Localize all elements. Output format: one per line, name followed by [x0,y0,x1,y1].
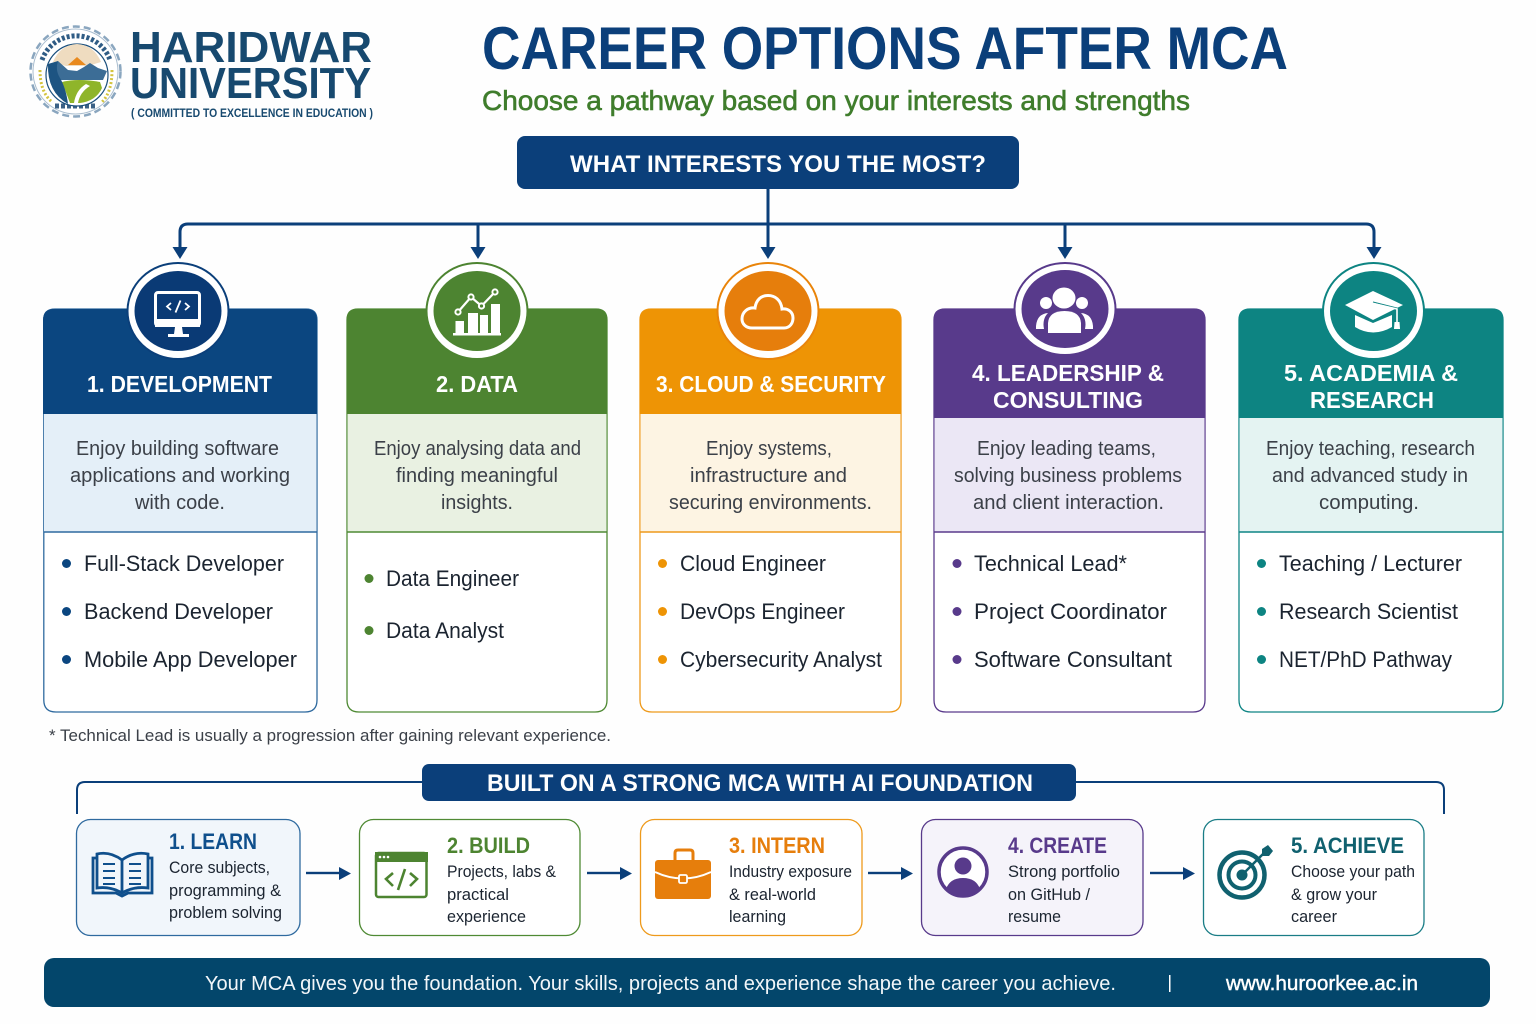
heading: 5. ACADEMIA & [1284,360,1458,386]
icon: profile [939,848,987,896]
arrow [306,867,351,880]
panel: 3. cloud and security [640,263,901,712]
role list: Cloud Engineer [680,551,826,576]
role list: DevOps Engineer [680,599,845,624]
logo wordmark: UNIVERSITY [130,59,371,108]
icon: monitor with code [128,263,228,359]
label: 1. LEARN [169,829,257,854]
text [169,859,282,922]
description: Enjoy leading teams, [977,438,1156,460]
icon: code window [375,852,428,897]
text: programming & [169,882,281,900]
role list [1257,551,1462,672]
subtitle: Choose a pathway based on your interests and strengths [482,85,1190,116]
role list: Teaching / Lecturer [1279,551,1462,576]
step 4: create [922,820,1143,936]
foundation banner: BUILT ON A STRONG MCA WITH AI FOUNDATION [487,770,1033,797]
label: 5. ACHIEVE [1291,833,1404,858]
step 2: build [360,820,580,936]
panel: 4. leadership and consulting [934,263,1205,712]
role list: Data Analyst [386,618,504,643]
role list: Full-Stack Developer [84,551,284,576]
panel: 2. data [346,263,607,712]
logo wordmark: ( COMMITTED TO EXCELLENCE IN EDUCATION ) [131,106,373,120]
description: insights. [441,492,513,514]
description: securing environments. [669,492,872,514]
description: and client interaction. [973,492,1164,514]
description: finding meaningful [396,465,558,487]
description: computing. [1319,492,1419,514]
step 1: learn [76,820,300,936]
icon: briefcase [655,850,711,899]
role list: Project Coordinator [974,599,1167,624]
panel: 5. academia and research: RESEARCH [1310,387,1434,413]
description: applications and working [70,465,290,487]
arrow [587,867,632,880]
description: Enjoy systems, [706,438,832,460]
description [954,438,1182,514]
role list [952,551,1172,672]
text: Strong portfolio [1008,863,1120,881]
foundation bracket [77,782,1444,814]
text: resume [1008,908,1061,926]
icon: target with arrow [1220,845,1273,898]
heading: 3. CLOUD & SECURITY [656,371,886,397]
panel: 1. development [43,263,317,712]
icon: graduation cap [1323,263,1424,359]
text [729,863,852,926]
text: experience [447,908,526,926]
icon: bar and line chart [426,263,528,359]
icon: team [1014,263,1116,355]
role list: Backend Developer [84,599,273,624]
foundation banner [422,764,1076,801]
footer bar: www.huroorkee.ac.in [1225,973,1418,995]
label: 3. INTERN [729,833,825,858]
role list: Technical Lead* [974,551,1127,576]
footer bar: Your MCA gives you the foundation. Your skills, projects and experience shape the career you achieve. [205,973,1116,995]
role list [658,551,882,672]
role list [364,566,519,643]
role list: Mobile App Developer [84,647,297,672]
logo wordmark: HARIDWAR [130,23,372,72]
description [70,438,290,514]
text: on GitHub / [1008,886,1090,904]
label: 2. BUILD [447,833,530,858]
footer bar [44,958,1490,1007]
description: Enjoy analysing data and [374,438,581,460]
text [1008,863,1120,926]
text: learning [729,908,786,926]
logo wordmark [130,23,373,120]
footnote: * Technical Lead is usually a progression after gaining relevant experience. [49,726,611,745]
text [1291,863,1415,926]
step 5: achieve [1204,820,1424,936]
arrow [1150,867,1195,880]
role list: Software Consultant [974,647,1172,672]
text: & real-world [729,886,816,904]
description: Enjoy building software [76,438,279,460]
text: career [1291,908,1337,926]
text [447,863,556,926]
description: Enjoy teaching, research [1266,438,1475,460]
icon: cloud [718,263,818,359]
text: problem solving [169,904,282,922]
text: & grow your [1291,886,1377,904]
text: practical [447,886,509,904]
arrow [868,867,913,880]
heading: 4. LEADERSHIP & [972,360,1164,386]
text: Choose your path [1291,863,1415,881]
text: Core subjects, [169,859,270,877]
role list: Research Scientist [1279,599,1458,624]
description [669,438,872,514]
description: infrastructure and [690,465,847,487]
text: Industry exposure [729,863,852,881]
question banner: WHAT INTERESTS YOU THE MOST? [570,151,986,178]
description [1266,438,1475,514]
icon: open book [93,853,152,896]
question banner [517,136,1019,189]
role list: NET/PhD Pathway [1279,647,1452,672]
step 3: intern [640,820,862,936]
description: solving business problems [954,465,1182,487]
role list [62,551,297,672]
description [374,438,581,514]
label: 4. CREATE [1008,833,1107,858]
heading: 1. DEVELOPMENT [87,371,272,397]
panel: 5. academia and research [1238,263,1503,712]
logo: university seal [30,26,120,116]
text: Projects, labs & [447,863,556,881]
description: with code. [134,492,225,514]
heading: 2. DATA [436,371,518,397]
role list: Data Engineer [386,566,519,591]
title: CAREER OPTIONS AFTER MCA [482,15,1288,82]
connector arrows to pathways [172,189,1382,259]
role list: Cybersecurity Analyst [680,647,882,672]
description: and advanced study in [1272,465,1468,487]
panel: 4. leadership and consulting: CONSULTING [993,387,1143,413]
